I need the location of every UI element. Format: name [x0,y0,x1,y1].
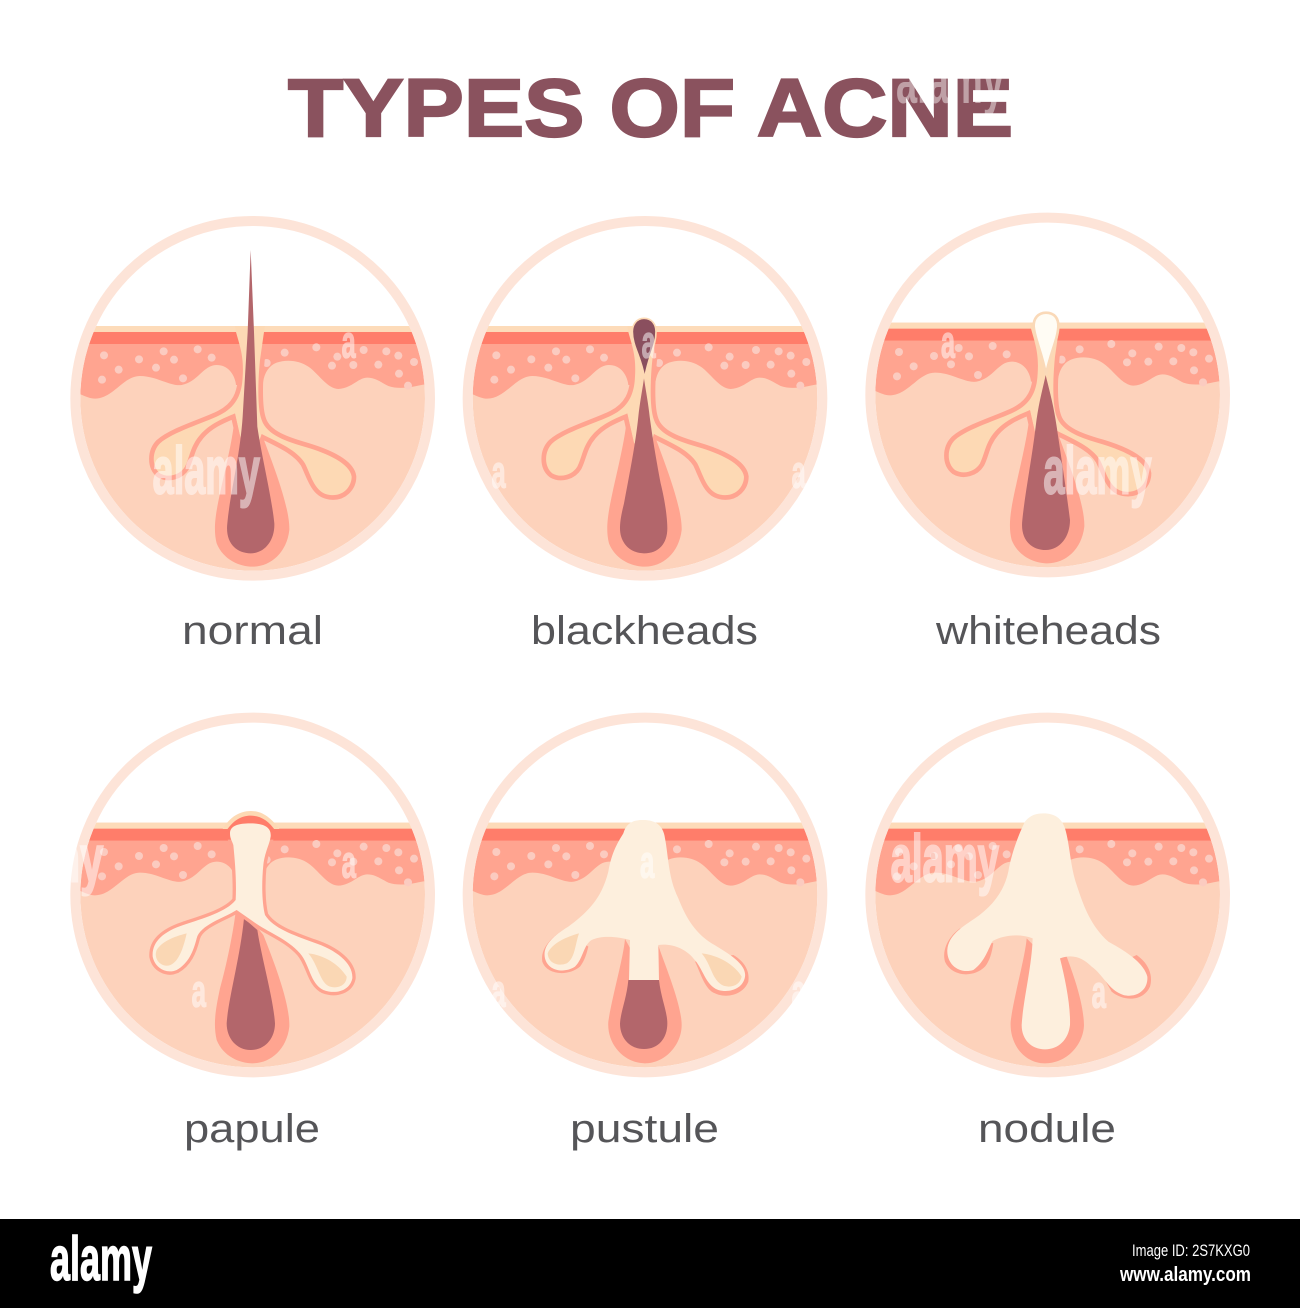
hair [227,250,274,553]
sebaceous glands [154,326,352,495]
label: nodule: nodule [978,1107,1116,1151]
pus mass [947,813,1147,1049]
left gland core [156,933,187,966]
follicle [607,414,682,567]
follicle [215,912,289,1063]
follicle wall [1011,938,1084,1063]
label: papule: papule [184,1107,320,1151]
hair stump [620,980,667,1049]
left gland outline [944,928,993,974]
image id: Image ID: 2S7KXG0 [1132,1241,1250,1260]
title watermark: alamy [896,43,1004,117]
hair [227,918,275,1050]
right gland core [702,953,742,987]
right gland outline [1100,955,1151,999]
watermark letter right: a [342,837,357,888]
left gland outline [542,929,588,973]
bump inner layer [226,816,276,832]
hair [620,378,667,553]
panel: normal [60,221,460,593]
skin layers [855,218,1255,589]
label: pustule: pustule [570,1107,719,1151]
watermark: alamy [153,434,260,508]
watermark letter: a [642,316,656,367]
footer band [0,1219,1300,1308]
label: normal: normal [182,609,323,653]
skin layers [855,718,1255,1089]
watermark letter: a [1092,967,1107,1018]
follicle [215,414,289,567]
label: whiteheads: whiteheads [935,609,1161,653]
whitehead plug [1034,313,1058,375]
footer url: www.alamy.com [1119,1264,1251,1286]
left gland core [548,933,579,965]
watermark letter right: a [792,446,806,497]
watermark letter: a [192,966,207,1017]
pus-filled duct [153,823,352,992]
label: blackheads: blackheads [531,609,758,653]
watermark: alamy [1043,434,1152,508]
watermark letter: a [640,837,655,888]
footer logo: alamy [50,1225,152,1294]
title: TYPES OF ACNE [288,63,1013,154]
watermark letter left: a [492,966,506,1017]
duct outline [153,823,352,992]
watermark letter: a [941,317,956,368]
follicle [608,939,682,1063]
watermark letter right: a [792,966,806,1017]
panel: papule [70,712,435,1078]
panel: whiteheads [855,218,1255,589]
follicle [1010,411,1084,563]
pus mass [545,820,745,991]
panel: pustule [452,718,852,1089]
blackhead plug [632,318,656,378]
watermark letter: a [342,317,356,368]
skin layers [60,718,460,1089]
skin layers [452,718,852,1089]
right gland core [308,953,347,987]
skin bump [223,811,279,829]
skin layers [60,221,460,593]
skin layers [452,221,852,593]
panel: blackheads [452,221,852,593]
sebaceous glands [949,323,1147,492]
panel: nodule [855,718,1255,1089]
watermark: alamy [891,823,999,897]
watermark letter left: a [492,446,506,497]
sebaceous glands [546,326,744,495]
hair [1022,375,1070,550]
right gland outline [695,955,749,996]
